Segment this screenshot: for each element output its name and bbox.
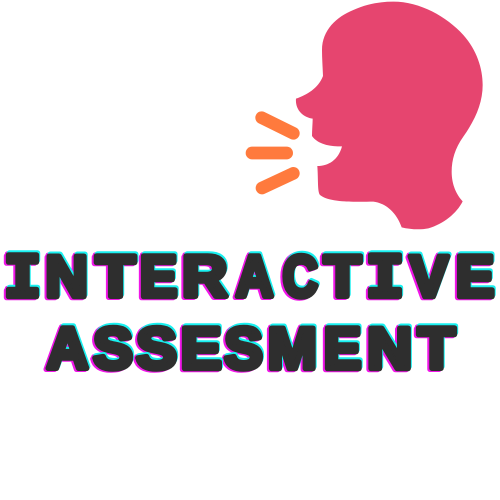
title line 2: ASSESMENT: S xyxy=(224,316,263,381)
title line 2: ASSESMENT: M xyxy=(268,316,317,381)
title line 1: INTERACTIVE: A xyxy=(236,244,273,309)
title line 1: INTERACTIVE: T xyxy=(96,244,135,309)
title line 2: ASSESMENT: S xyxy=(136,316,177,381)
title line 2: ASSESMENT: N xyxy=(367,316,412,381)
icon: orange speech burst lines xyxy=(252,118,293,188)
title line 2: ASSESMENT: A xyxy=(47,316,88,381)
title line 2: ASSESMENT: T xyxy=(418,316,455,381)
title line 1: INTERACTIVE: I xyxy=(4,244,41,315)
title line 2: ASSESMENT: S xyxy=(93,316,133,381)
title line 2: ASSESMENT: E xyxy=(324,316,361,381)
title line 2: ASSESMENT xyxy=(47,316,455,381)
title line 1: INTERACTIVE: N xyxy=(45,244,88,309)
title line 1: INTERACTIVE: I xyxy=(366,244,404,315)
title line 2: ASSESMENT: E xyxy=(181,316,222,381)
icon: speaking head xyxy=(296,2,483,229)
title line 1: INTERACTIVE xyxy=(4,244,494,315)
title line 1: INTERACTIVE: C xyxy=(283,244,318,309)
title line 1: INTERACTIVE: E xyxy=(140,244,177,309)
title line 1: INTERACTIVE: V xyxy=(410,244,449,309)
title line 1: INTERACTIVE: E xyxy=(456,244,494,309)
title line 1: INTERACTIVE: T xyxy=(324,244,361,309)
title line 1: INTERACTIVE: R xyxy=(182,244,227,309)
